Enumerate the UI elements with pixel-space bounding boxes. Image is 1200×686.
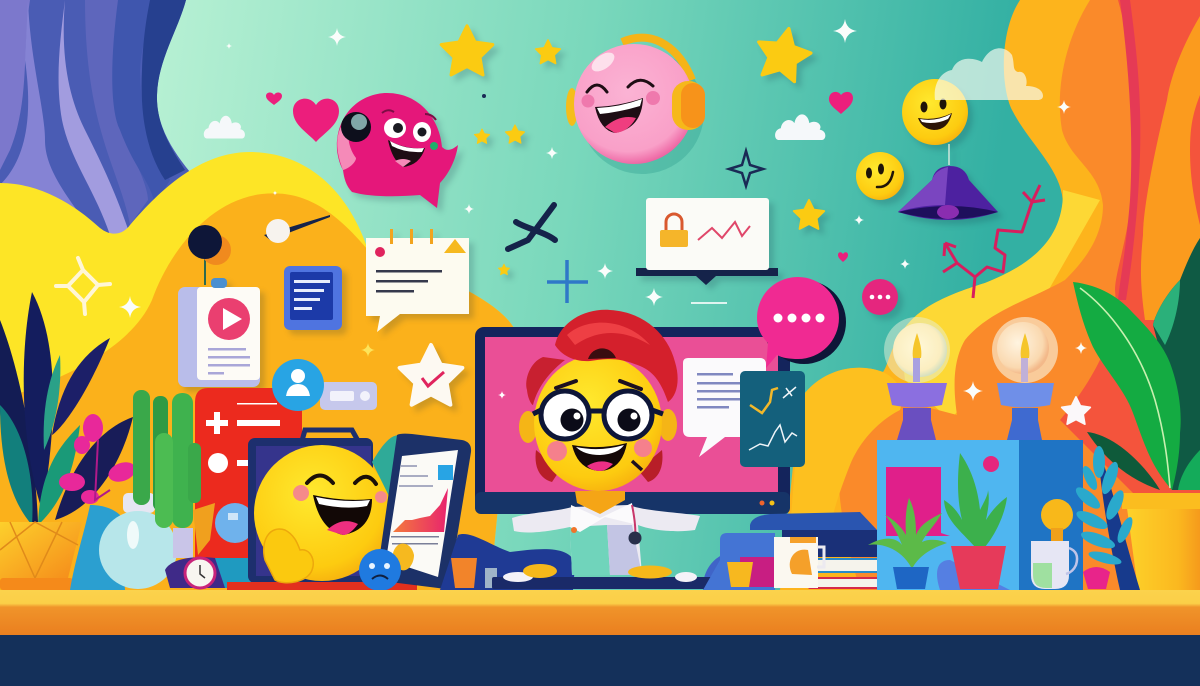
- icon: white star check: [400, 345, 462, 405]
- ears: [519, 411, 537, 443]
- panel: lock chart card: [636, 198, 778, 285]
- icon: jars: [1031, 499, 1110, 589]
- icon: white knob: [264, 215, 330, 243]
- icon: table lamps: [884, 317, 1058, 440]
- icon: gold stars: [441, 23, 824, 275]
- panel: right plant: [1073, 238, 1200, 590]
- panel: laptop: [227, 430, 417, 590]
- panel: character: [512, 310, 700, 575]
- panel: keyboard with hands: [492, 564, 725, 589]
- icon: cactus: [133, 390, 201, 558]
- panel: notepad speech card: [366, 229, 469, 332]
- icon: translucent cloud: [935, 48, 1043, 100]
- panel: red calculator: [195, 388, 302, 558]
- panel: pink monitor: [475, 327, 790, 514]
- icon: pink headphone emoji: [566, 38, 705, 174]
- icon: pink creature: [337, 93, 458, 208]
- icon: blue blob behind keyboard: [440, 534, 745, 590]
- panel: right wavy bands: [780, 0, 1200, 590]
- icon: smiley top right: [902, 79, 968, 145]
- icon: red squiggle arrows: [943, 185, 1045, 298]
- panel: purple curtain: [0, 0, 190, 240]
- icon: compass sparkle dark: [729, 151, 763, 186]
- icon: blue plus: [547, 260, 588, 303]
- icon: small dots and dash: [482, 94, 727, 304]
- panel: desk: [0, 590, 1200, 686]
- hair: [555, 310, 678, 402]
- panel: yellow blob: [0, 152, 515, 590]
- icon: pin balloon: [188, 225, 231, 285]
- icon: speech bubble on monitor: [683, 358, 766, 457]
- panel: video card: [178, 278, 260, 387]
- lower hair left: [536, 450, 560, 482]
- icon: alarm clock and globe: [165, 503, 255, 588]
- icon: sparkle outline: [56, 258, 110, 314]
- panel: blue cabinet: [877, 440, 1083, 590]
- icon: small pink chat dots: [862, 279, 898, 315]
- icon: blue sad emoji: [359, 543, 414, 591]
- icon: teal fern: [1073, 446, 1140, 590]
- head: [534, 355, 662, 491]
- icon: teal chart card: [740, 371, 805, 467]
- icon: stacked books: [703, 512, 900, 590]
- panel: phone: [372, 434, 471, 588]
- icon: gold sparkle: [361, 343, 375, 357]
- icon: orange jar and glass: [451, 558, 497, 588]
- panel: left plants: [0, 292, 138, 525]
- panel: amber blob: [0, 193, 515, 590]
- icon: white sparkles: [119, 19, 1087, 401]
- icon: pink hearts: [266, 92, 853, 262]
- coat and arms: [512, 505, 700, 575]
- icon: purple hanging lamp: [898, 144, 998, 220]
- icon: white star: [1062, 397, 1090, 424]
- neck: [575, 491, 625, 514]
- lower hair right: [638, 450, 662, 482]
- flowers: [59, 414, 138, 504]
- icon: smiley small: [856, 152, 904, 200]
- icon: small clouds: [204, 114, 825, 140]
- icon: yellow planter left: [0, 522, 82, 590]
- mouth: [572, 443, 627, 471]
- icon: orange mug and cup: [727, 537, 824, 588]
- icon: pink chat bubble: [757, 277, 846, 368]
- brows: [556, 381, 641, 389]
- glasses: [533, 391, 663, 439]
- icon: big laughing emoji: [254, 445, 390, 583]
- icon: blue document: [284, 266, 342, 330]
- icon: user badge: [272, 359, 377, 411]
- icon: blue vase and bottle: [70, 493, 177, 590]
- icon: dark cross: [508, 205, 555, 249]
- icon: potted plants: [868, 453, 1007, 589]
